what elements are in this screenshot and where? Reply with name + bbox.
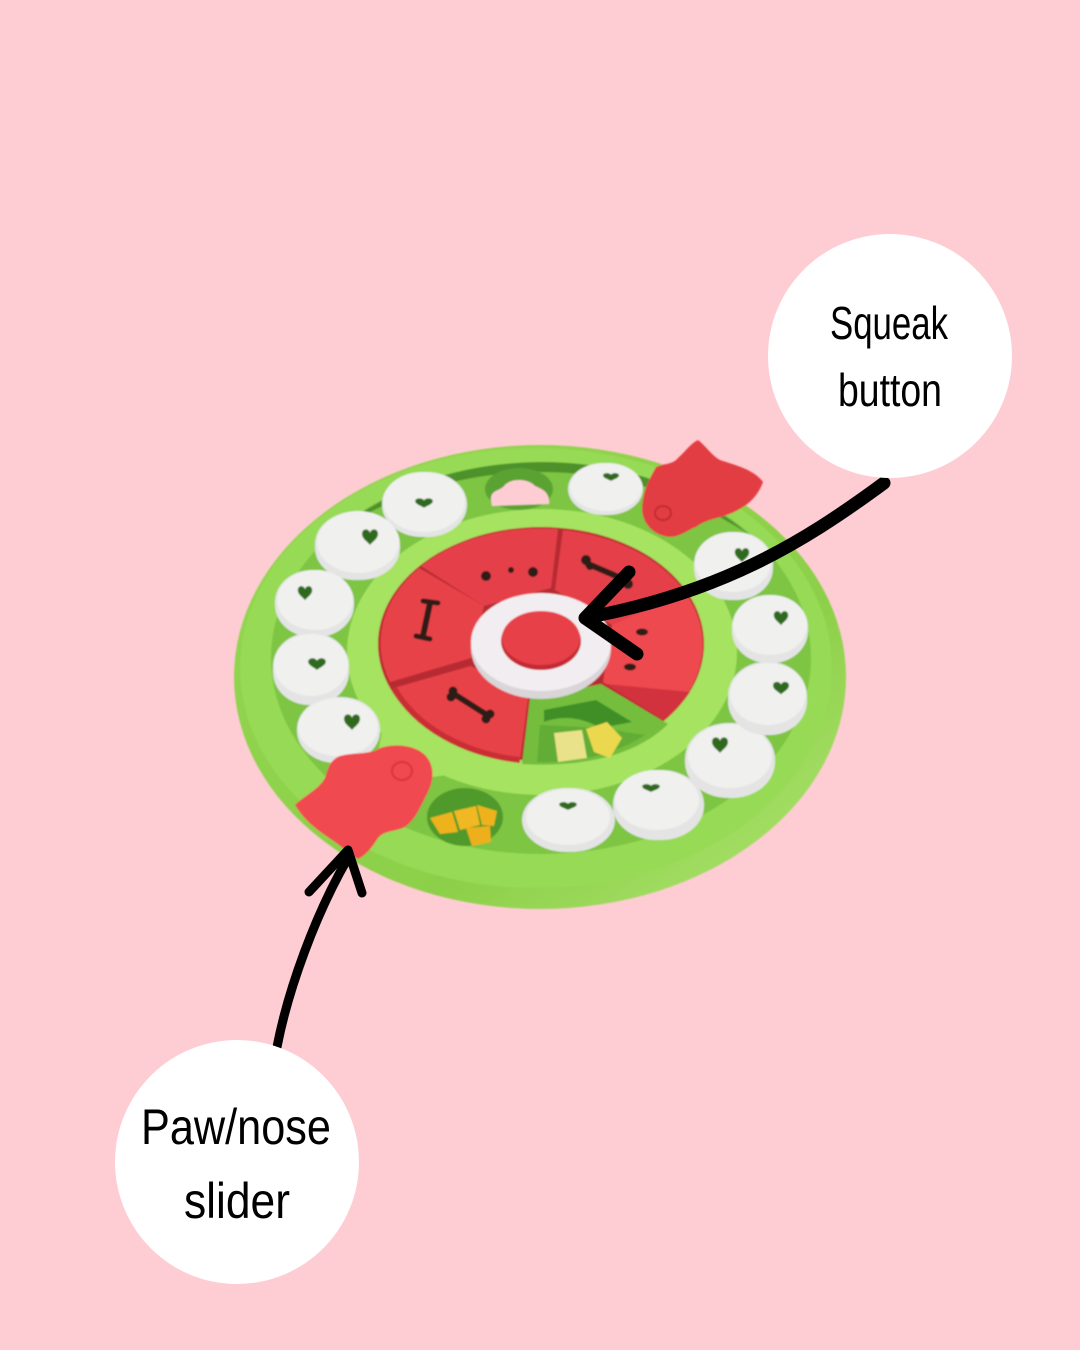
white treat pucks [273, 463, 808, 852]
outer green disc [234, 445, 846, 909]
puck 1 [382, 472, 467, 537]
puck 7 [613, 770, 704, 840]
segment: bottom left with bone [394, 666, 528, 760]
puzzle toy [234, 440, 846, 909]
white ring with red squeak button [471, 593, 611, 699]
inner green ring [347, 509, 737, 795]
puck 10 [732, 595, 808, 663]
callout: squeak button [768, 234, 1012, 478]
puck 3 [275, 570, 354, 637]
segment: top right with bone [555, 530, 685, 625]
puck 4 [273, 633, 349, 705]
callout: squeak button: button [838, 364, 942, 416]
puck 5 [297, 697, 380, 763]
arrow to squeak button [585, 483, 884, 654]
bottom hole with yellow treats [427, 788, 503, 846]
callout: paw/nose slider: slider [184, 1173, 290, 1229]
red slider top right [642, 440, 763, 537]
puck 6 [522, 788, 615, 852]
callout: paw/nose slider [115, 1040, 359, 1284]
puck 2 [315, 511, 400, 580]
food tray with yellow cubes [522, 684, 668, 765]
puck 12 [568, 463, 643, 515]
puck 9 [728, 662, 807, 735]
puck 11 [694, 532, 773, 600]
puck 8 [685, 723, 775, 798]
top hole with pink cut-out [485, 468, 553, 510]
red slider bottom left [295, 745, 433, 859]
red wheel segments [378, 527, 704, 761]
callout: squeak button: Squeak [830, 297, 949, 349]
callout: paw/nose slider: Paw/nose [141, 1099, 331, 1155]
segment: left with bone [381, 568, 484, 682]
arrow to slider [277, 850, 362, 1047]
segment: top with dots [421, 528, 558, 606]
segment: right [603, 592, 703, 720]
